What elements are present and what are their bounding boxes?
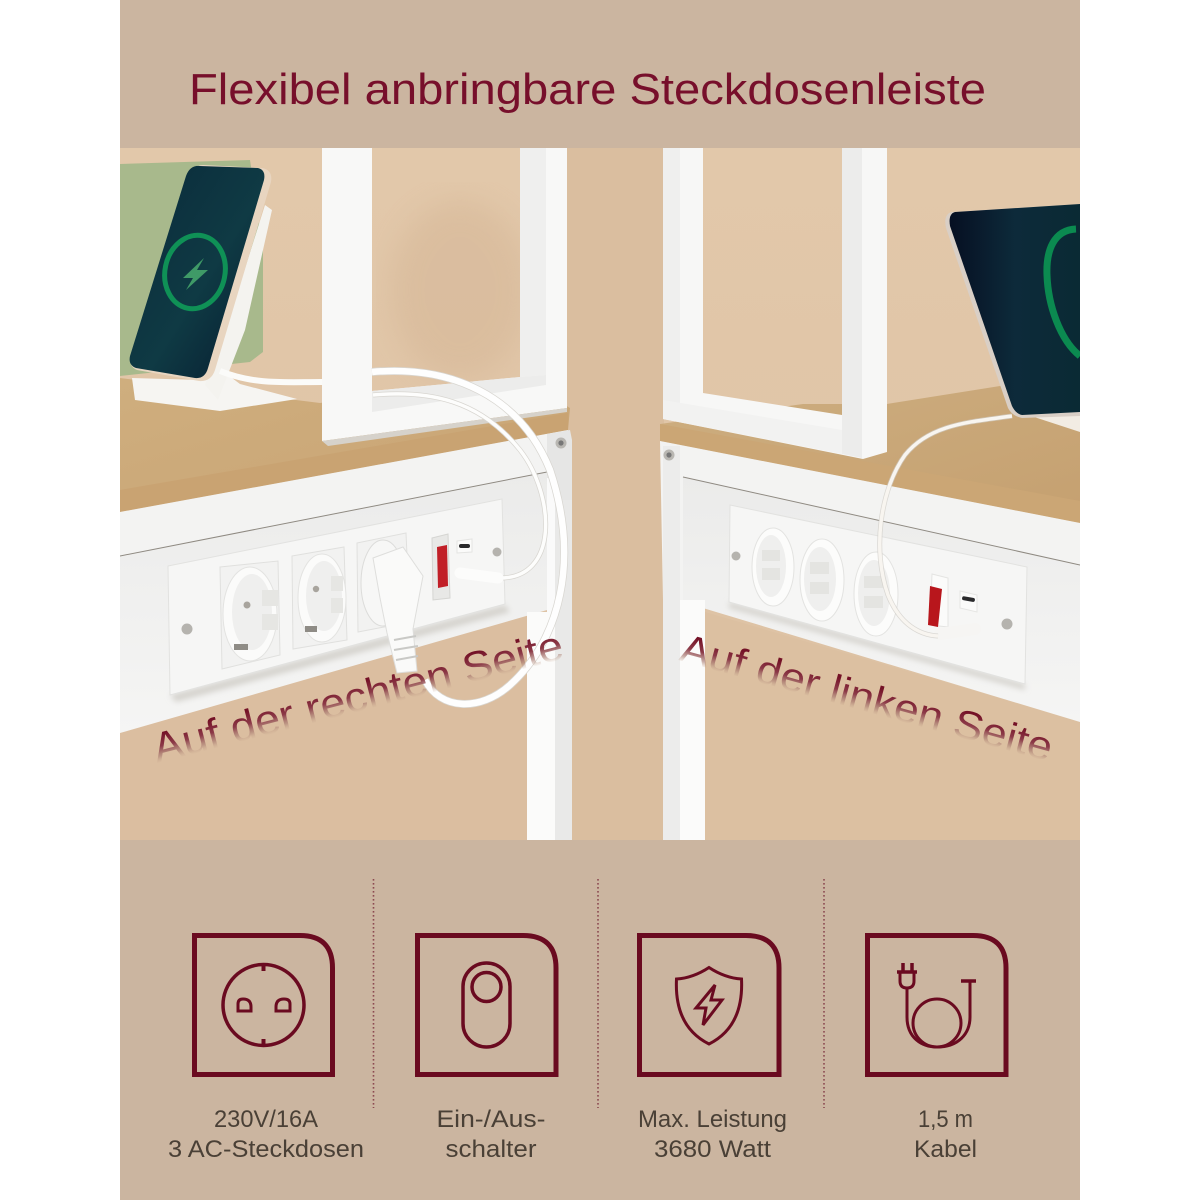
bolt <box>183 258 208 290</box>
label <box>436 1106 546 1163</box>
usb plug <box>940 629 975 634</box>
tablet stand <box>1025 412 1080 432</box>
usb-c port <box>960 591 977 612</box>
wood front edge <box>660 424 870 482</box>
wood shelf <box>120 378 570 490</box>
wall shadow <box>402 212 518 366</box>
charging cable <box>220 371 322 382</box>
icon: socket <box>194 936 332 1074</box>
shelf screw <box>664 450 674 460</box>
label <box>638 1106 787 1163</box>
plate shadow <box>729 602 1025 690</box>
label: 1,5 m <box>918 1106 973 1133</box>
divider 1 <box>372 879 374 1108</box>
scene: mounted on the left side <box>660 148 1080 840</box>
scene: mounted on the right side <box>120 148 572 840</box>
middle wall strip <box>567 148 664 492</box>
panel: product photo <box>120 148 1080 840</box>
inner panel <box>683 477 1080 722</box>
feature: socket <box>168 936 364 1163</box>
feature: power <box>638 936 787 1163</box>
wood front edge <box>120 430 564 512</box>
inner panel <box>120 472 547 733</box>
small cable <box>373 394 546 578</box>
power strip plate <box>729 505 1027 684</box>
tablet cable <box>880 416 1012 636</box>
stand base <box>132 376 297 411</box>
divider 3 <box>823 879 825 1108</box>
wall <box>120 148 1080 717</box>
phone <box>130 165 271 381</box>
socket 2 <box>292 547 347 649</box>
label: 3 AC-Steckdosen <box>168 1136 364 1163</box>
panel top line <box>120 472 547 556</box>
panel top line <box>683 477 1080 565</box>
usb plug <box>498 575 504 580</box>
stand arm <box>216 205 272 371</box>
shelf screw <box>556 438 566 448</box>
socket 2 <box>800 539 844 621</box>
switch <box>432 534 450 600</box>
label: 230V/16A <box>214 1106 318 1133</box>
main cable <box>372 371 564 704</box>
switch <box>928 574 948 627</box>
apron <box>660 441 1080 600</box>
socket 1 <box>752 528 794 606</box>
frame <box>322 148 567 446</box>
feature: switch <box>418 936 556 1163</box>
plug <box>373 547 423 673</box>
plate screws <box>732 552 1012 630</box>
icon: shield <box>640 936 779 1074</box>
label: 3680 Watt <box>654 1136 771 1163</box>
text: right side: Auf der rechten Seite <box>148 621 568 772</box>
tablet <box>945 204 1080 418</box>
plate screws <box>182 548 502 634</box>
socket 3 <box>854 552 898 636</box>
lower wall shade <box>705 612 1080 840</box>
background: beige panel <box>120 0 1080 1200</box>
socket 1 <box>220 561 280 669</box>
frame <box>663 148 887 459</box>
apron <box>120 430 572 556</box>
label: Max. Leistung <box>638 1106 787 1133</box>
charging ring <box>162 232 228 312</box>
icon: cable <box>868 936 1006 1074</box>
divider 2 <box>597 879 599 1108</box>
left leg <box>663 446 705 840</box>
label <box>914 1106 977 1163</box>
text: left side: Auf der linken Seite <box>676 626 1058 770</box>
socket 3 <box>357 533 410 632</box>
label: Ein-/Aus- <box>436 1106 546 1133</box>
charging arc <box>1047 229 1080 356</box>
label <box>168 1106 364 1163</box>
title: Flexibel anbringbare Steckdosenleiste <box>189 65 986 114</box>
plate shadow <box>170 605 510 702</box>
power strip plate <box>168 499 505 695</box>
lower wall shade <box>120 610 530 840</box>
wood shelf <box>660 386 1080 523</box>
usb-c port <box>457 539 472 553</box>
label: Kabel <box>914 1136 977 1163</box>
right leg <box>527 430 572 840</box>
feature: cable <box>868 936 1006 1163</box>
icon: switch <box>418 936 556 1074</box>
label: schalter <box>446 1136 536 1163</box>
green box <box>120 160 263 376</box>
